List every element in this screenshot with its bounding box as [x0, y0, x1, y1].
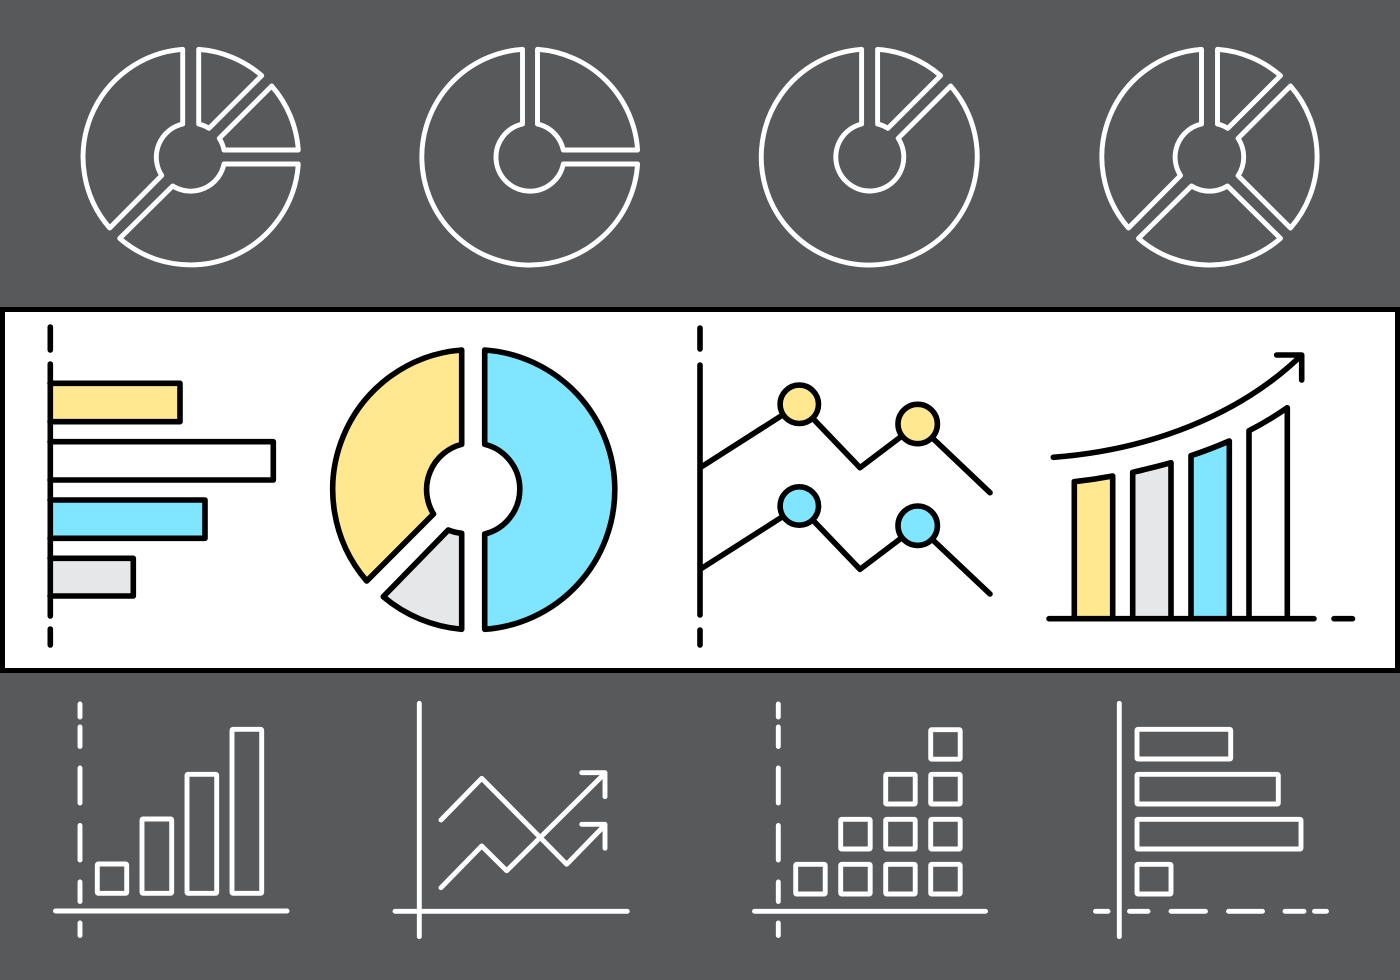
chart: coloured horizontal bars — [50, 327, 273, 645]
icon: donut chart with two segments — [422, 49, 638, 265]
icon: donut chart with small wedge — [761, 49, 977, 265]
icon: white outline stacked square chart — [754, 704, 986, 936]
icon: white outline horizontal bar chart — [1096, 703, 1326, 937]
icon: donut chart with four segments — [83, 49, 298, 265]
icon: white outline line chart with arrows — [395, 703, 627, 937]
icon: donut chart with four even segments — [1102, 49, 1317, 265]
chart: coloured line chart with markers — [700, 328, 990, 645]
chart: coloured donut — [333, 350, 615, 629]
icon: white outline bar chart — [56, 704, 287, 936]
chart: coloured rising bars with trend arrow — [1049, 355, 1352, 619]
panel: white coloured chart band — [2, 310, 1398, 670]
